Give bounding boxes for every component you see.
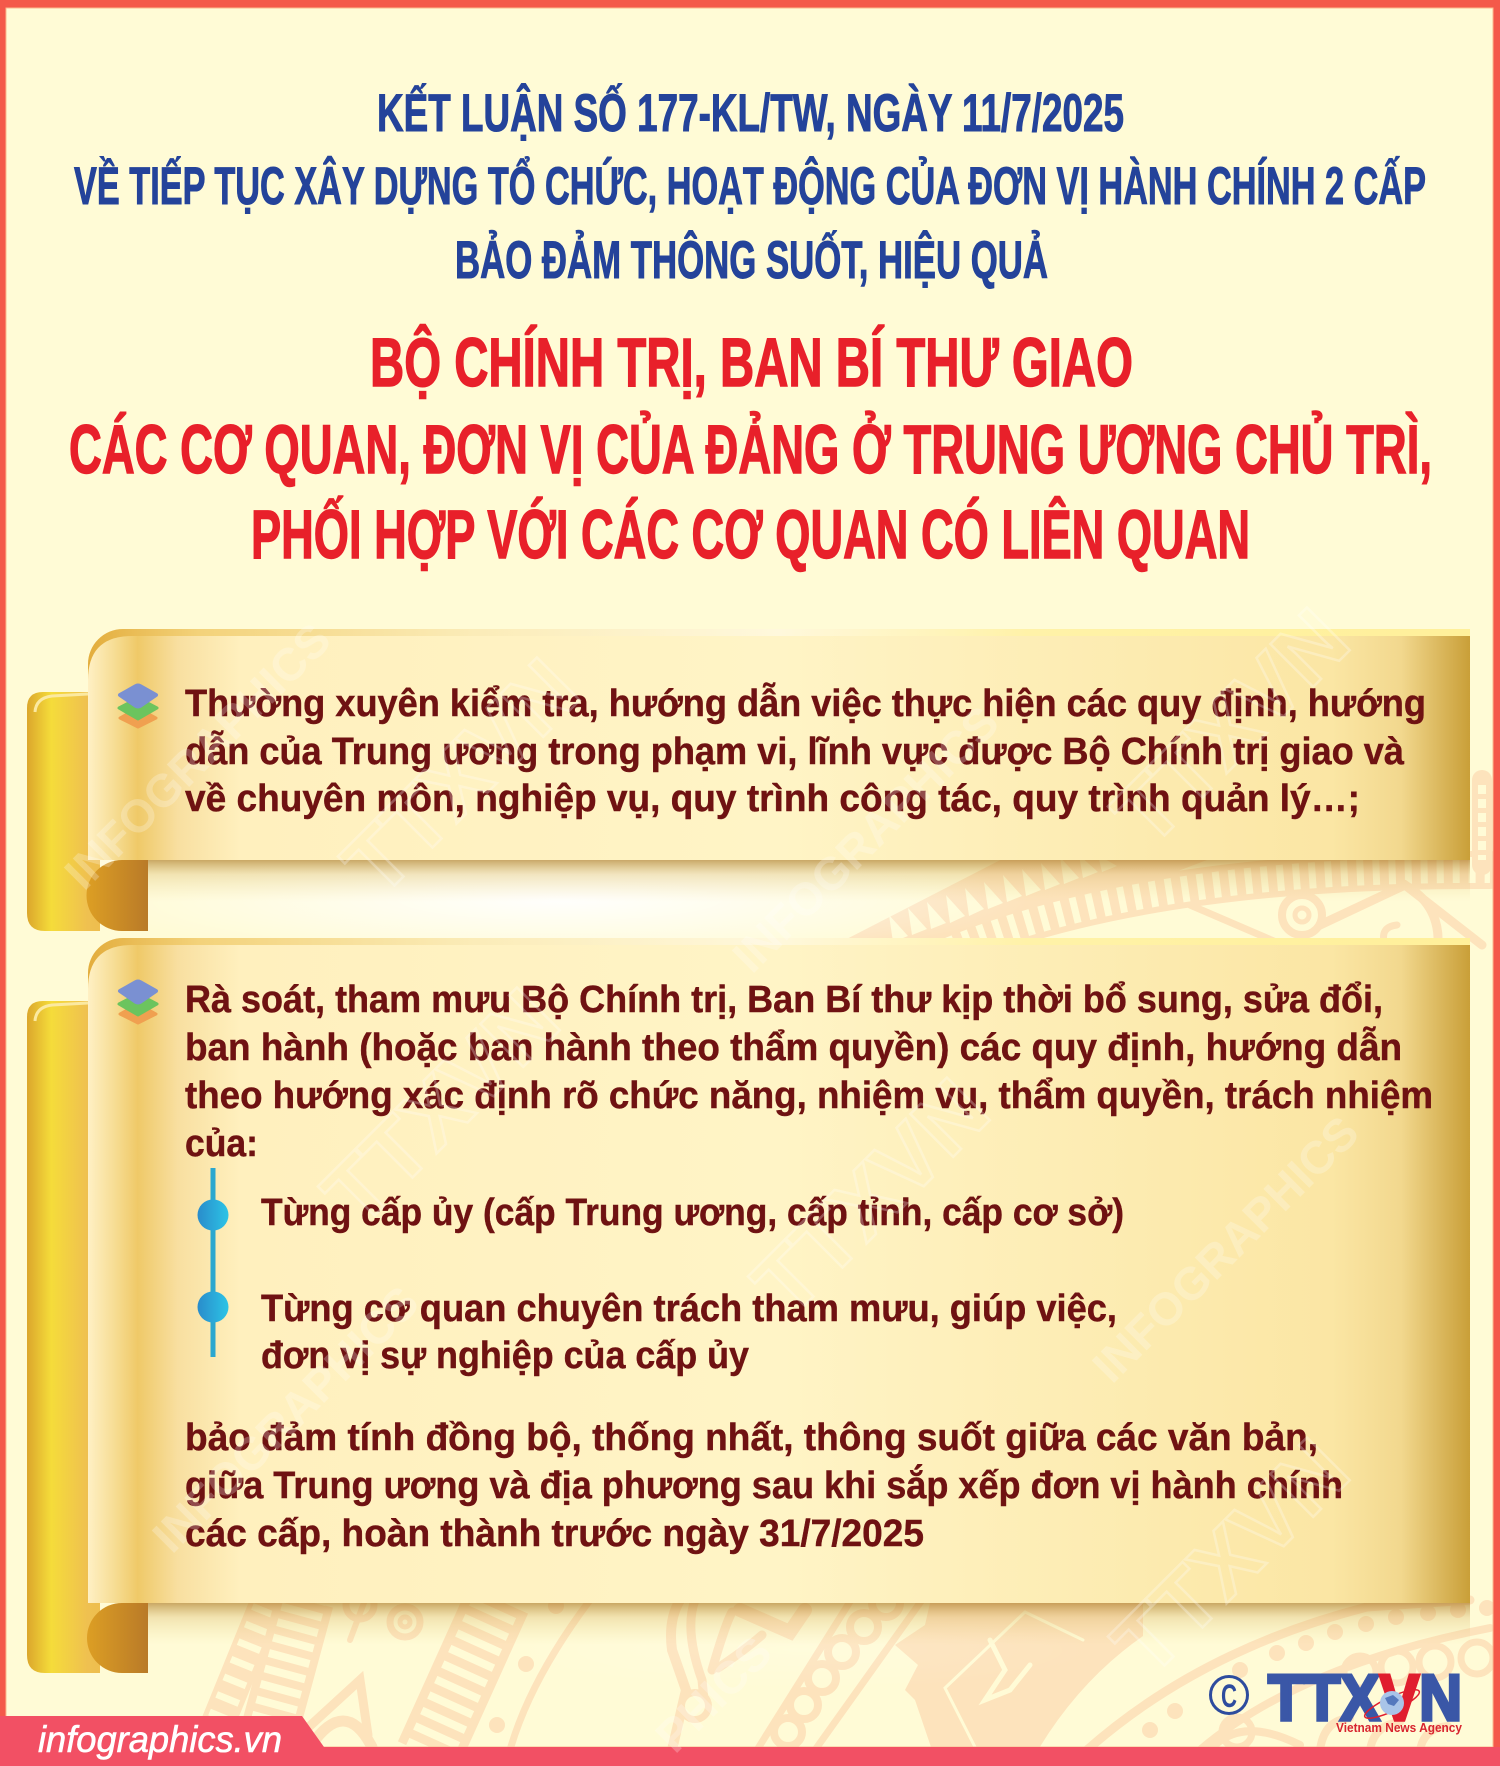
text: scroll 2 intro — [185, 979, 1433, 1165]
text: scroll 2 intro: ban hành (hoặc ban hành theo thẩm quyền) các quy định, hướng dẫn — [185, 1025, 1402, 1069]
watermarks: TTXVN — [303, 969, 577, 1243]
text: bullet list — [261, 1192, 1124, 1377]
text: bullet list: Từng cấp ủy (cấp Trung ương, cấp tỉnh, cấp cơ sở) — [261, 1192, 1124, 1234]
text: scroll 2 conclusion — [185, 1417, 1343, 1555]
text: scroll 2 conclusion: bảo đảm tính đồng bộ, thống nhất, thông suốt giữa các văn bản, — [185, 1417, 1318, 1459]
red heading — [69, 324, 1432, 573]
text: scroll 1 body: về chuyên môn, nghiệp vụ, quy trình công tác, quy trình quản lý…; — [185, 778, 1360, 820]
text: scroll 1 body — [185, 681, 1426, 820]
text: scroll 2 intro: Rà soát, tham mưu Bộ Chính trị, Ban Bí thư kịp thời bổ sung, sửa đổi, — [185, 979, 1383, 1021]
blue heading — [74, 82, 1426, 290]
watermarks: INFOGRAPHICS — [1082, 1106, 1368, 1392]
watermarks — [54, 589, 1368, 1762]
panel: scroll 1 — [27, 629, 1470, 960]
footer band: infographics.vn — [38, 1719, 282, 1760]
watermarks: PHICS — [645, 1626, 781, 1762]
text: bullet list: Từng cơ quan chuyên trách tham mưu, giúp việc, — [261, 1288, 1117, 1330]
watermarks: TTXVN — [1093, 1419, 1367, 1693]
decorative bronze drum pattern — [205, 780, 1495, 1755]
logo: TTXVN: Vietnam News Agency — [1336, 1720, 1463, 1735]
text: scroll 2 conclusion: giữa Trung ương và địa phương sau khi sắp xếp đơn vị hành chính — [185, 1463, 1343, 1507]
text: bullet list: đơn vị sự nghiệp của cấp ủy — [261, 1335, 749, 1377]
text: scroll 1 body: dẫn của Trung ương trong phạm vi, lĩnh vực được Bộ Chính trị giao và — [185, 729, 1405, 773]
watermarks: TTXVN — [733, 1059, 1007, 1333]
footer band — [0, 1716, 1500, 1766]
text: scroll 1 body: Thường xuyên kiểm tra, hướng dẫn việc thực hiện các quy định, hướng — [185, 681, 1426, 725]
red heading: BỘ CHÍNH TRỊ, BAN BÍ THƯ GIAO — [370, 324, 1133, 401]
watermarks: INFOGRAPHICS — [722, 696, 1008, 982]
timeline with two bullets — [198, 1168, 228, 1357]
logo: TTXVN: C — [1221, 1678, 1237, 1714]
blue heading: BẢO ĐẢM THÔNG SUỐT, HIỆU QUẢ — [455, 229, 1048, 290]
blue heading: KẾT LUẬN SỐ 177-KL/TW, NGÀY 11/7/2025 — [377, 82, 1124, 143]
text: scroll 2 intro: của: — [185, 1123, 258, 1165]
watermarks: INFOGRAPHICS — [54, 613, 340, 899]
watermarks: INFOGRAPHICS — [142, 1276, 428, 1562]
watermarks: TTXVN — [1093, 589, 1367, 863]
panel: scroll 2 — [27, 938, 1470, 1690]
logo: TTXVN: TTXVN — [1268, 1661, 1462, 1734]
text: scroll 2 conclusion: các cấp, hoàn thành trước ngày 31/7/2025 — [185, 1513, 924, 1555]
text: scroll 2 intro: theo hướng xác định rõ chức năng, nhiệm vụ, thẩm quyền, trách nhiệm — [185, 1075, 1433, 1117]
watermarks: TTXVN — [323, 639, 597, 913]
icon: stacked layers 2 — [119, 982, 157, 1023]
icon: stacked layers 1 — [119, 686, 157, 727]
